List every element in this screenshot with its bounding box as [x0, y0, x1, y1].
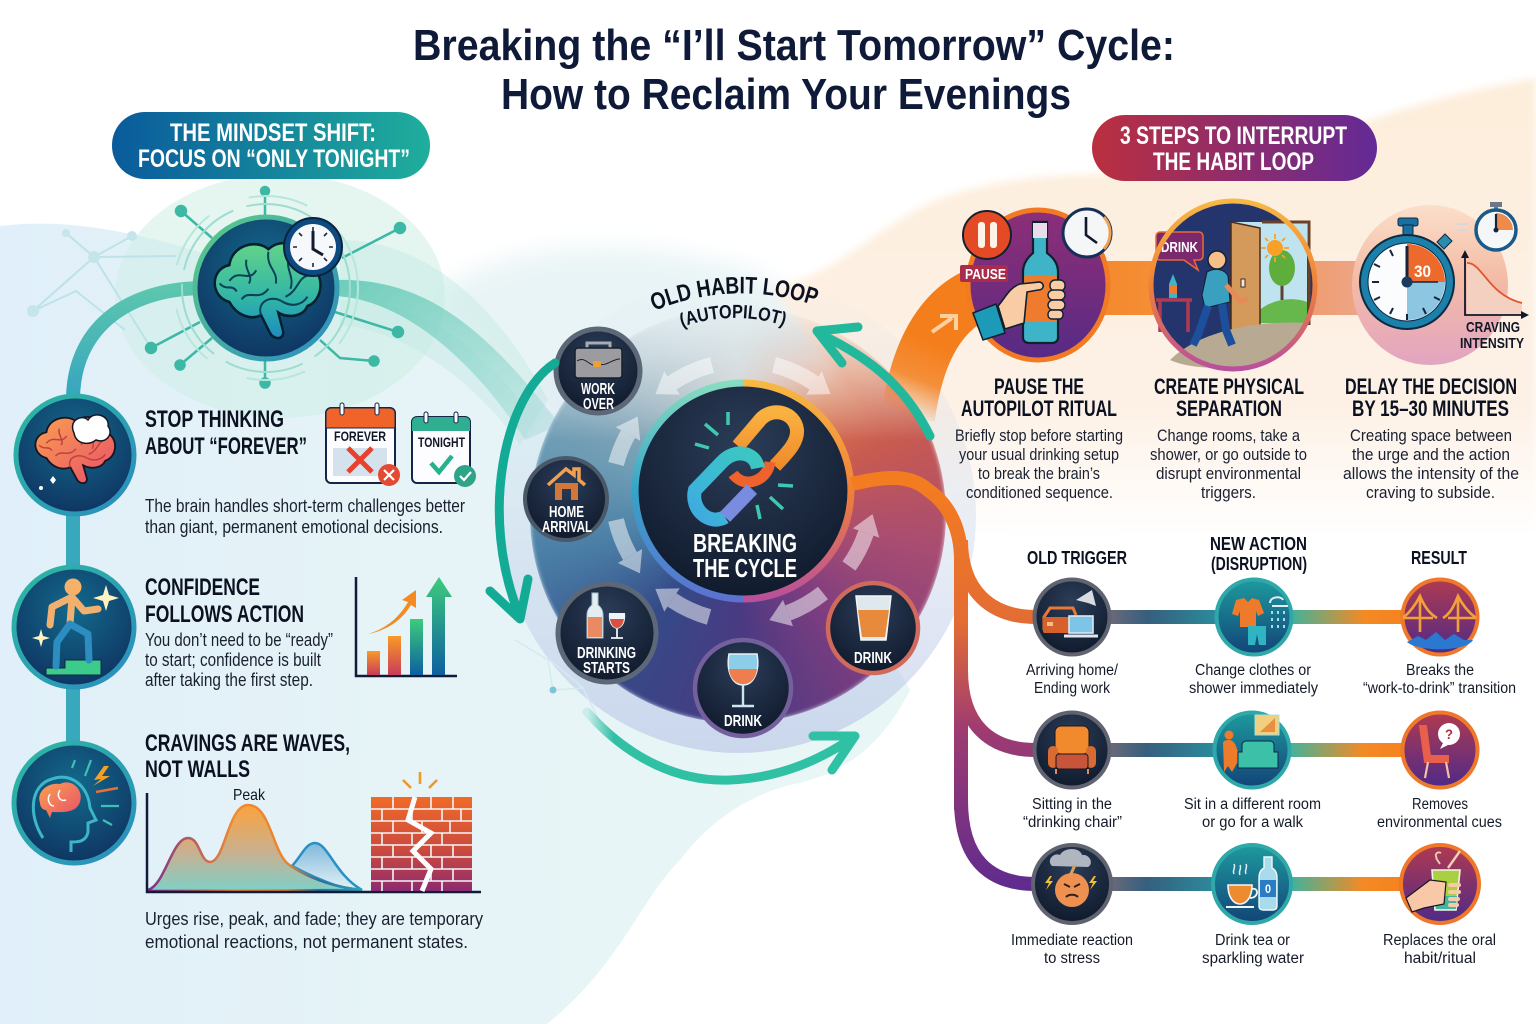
node: home arrival [525, 458, 607, 540]
heading pill: 3 steps: 3 STEPS TO INTERRUPT [1120, 122, 1347, 150]
step 3: delay [1343, 202, 1529, 502]
icon: climbing figure [14, 567, 134, 687]
item: stop thinking [16, 396, 476, 537]
icon: tea and water: 0 [1265, 882, 1271, 896]
loop label: old habit loop autopilot: OLD HABIT LOOP [650, 276, 818, 309]
captions: or go for a walk [1202, 814, 1303, 831]
central hub: breaking the cycle [635, 383, 851, 599]
heading pill: mindset shift [112, 112, 430, 179]
captions: Removes [1412, 796, 1468, 813]
panel: 3 steps to interrupt [490, 115, 1529, 780]
row connectors [1108, 610, 1406, 891]
icon: broken chain [694, 412, 797, 520]
node: home arrival: ARRIVAL [542, 519, 592, 536]
captions: Change clothes or [1195, 662, 1311, 679]
body text: emotional reactions, not permanent states. [145, 932, 468, 952]
body text: the urge and the action [1352, 446, 1510, 464]
body text: Creating space between [1350, 427, 1512, 445]
body text: after taking the first step. [145, 670, 313, 690]
label: drink bubble [1156, 232, 1203, 270]
central hub: breaking the cycle: THE CYCLE [693, 553, 797, 583]
arrows between loop stages [616, 365, 866, 617]
captions: Sit in a different room [1184, 796, 1321, 813]
body text: your usual drinking setup [959, 446, 1119, 464]
heading pill: 3 steps: THE HABIT LOOP [1153, 148, 1314, 176]
icon: sofa and person [1214, 712, 1290, 788]
node: work over: WORK [581, 381, 616, 398]
body text [1343, 427, 1519, 502]
body text: shower, or go outside to [1150, 446, 1307, 464]
captions [1023, 796, 1502, 831]
heading [145, 406, 307, 460]
arrow: bottom loop [587, 712, 855, 780]
heading [145, 574, 304, 628]
illustration: hand pausing bottle [960, 209, 1111, 360]
connecting orange band [908, 288, 1400, 418]
heading: FOLLOWS ACTION [145, 601, 304, 628]
panel: trigger to result table [852, 478, 1516, 967]
column heading: result: RESULT [1411, 548, 1467, 568]
icon: armchair [1034, 712, 1110, 788]
captions: shower immediately [1189, 680, 1318, 697]
row 2 [1023, 712, 1502, 831]
row 1 [1026, 580, 1516, 697]
icon: forever calendar [326, 403, 400, 486]
captions: environmental cues [1377, 814, 1502, 831]
heading: CONFIDENCE [145, 574, 260, 601]
heading: CRAVINGS ARE WAVES, [145, 730, 350, 757]
body text: Briefly stop before starting [955, 427, 1123, 445]
body text: triggers. [1201, 484, 1256, 502]
node: drinking starts [558, 584, 656, 682]
body text: You don’t need to be “ready” [145, 630, 333, 650]
branching trunk [852, 478, 1036, 884]
arrow: left loop [490, 363, 555, 619]
label: pause: PAUSE [965, 266, 1006, 283]
loop disc background [500, 277, 980, 753]
connecting band to loop [335, 240, 560, 445]
heading pill: mindset shift: THE MINDSET SHIFT: [170, 119, 376, 147]
icon: small up arrow on band [932, 316, 956, 332]
captions: Ending work [1034, 680, 1110, 697]
captions: Immediate reaction [1011, 932, 1133, 949]
icon: hand with glass [1401, 845, 1479, 923]
heading: STOP THINKING [145, 406, 284, 433]
captions [1026, 662, 1516, 697]
captions: “drinking chair” [1023, 814, 1122, 831]
node: drink wine: DRINK [724, 713, 763, 730]
captions [1011, 932, 1496, 967]
label: drink bubble: DRINK [1161, 240, 1198, 256]
heading: CREATE PHYSICAL [1154, 374, 1304, 399]
hub: brain with clock [146, 187, 405, 388]
body text [145, 630, 333, 690]
icon: clock [1063, 209, 1111, 257]
central hub: breaking the cycle: BREAKING [693, 528, 797, 558]
panel: old habit loop [504, 276, 976, 753]
illustration: stopwatch: 30 [1414, 262, 1431, 281]
captions: Breaks the [1406, 662, 1474, 679]
heading pill: 3 steps [1092, 115, 1377, 181]
chart: craving waves [147, 787, 481, 892]
step 1: pause [955, 209, 1123, 502]
illustration: stopwatch [1352, 202, 1529, 365]
node: drinking starts: STARTS [583, 660, 630, 677]
node: drink glass [828, 583, 918, 673]
node: home arrival: HOME [549, 504, 584, 521]
icon: car and laptop [1034, 580, 1110, 654]
icon: clothes and shower [1216, 580, 1292, 654]
column heading: new action [1210, 534, 1307, 574]
item: confidence [14, 567, 457, 690]
faint network at loop edge [515, 640, 600, 722]
title: How to Reclaim Your Evenings [501, 70, 1071, 119]
captions: habit/ritual [1404, 950, 1476, 967]
chart: rising bars [356, 577, 457, 676]
hand [973, 280, 1065, 340]
icon: bridge [1402, 580, 1478, 654]
captions: Arriving home/ [1026, 662, 1119, 679]
node: drink glass: DRINK [854, 650, 893, 667]
body text [1150, 427, 1307, 502]
body text [145, 909, 483, 952]
body text: The brain handles short-term challenges better [145, 496, 465, 516]
body text [145, 496, 465, 537]
icon: small stopwatch [1456, 202, 1516, 250]
captions: “work-to-drink” transition [1363, 680, 1516, 697]
icon: tea and water [1213, 845, 1291, 923]
column heading: new action: NEW ACTION [1210, 534, 1307, 554]
body text: allows the intensity of the [1343, 465, 1519, 483]
icon: head with brain [14, 743, 134, 863]
icon: chair and question: ? [1445, 726, 1453, 742]
icon: tonight calendar [412, 412, 476, 487]
body text: than giant, permanent emotional decisions. [145, 517, 443, 537]
body text: conditioned sequence. [966, 484, 1113, 502]
arrow: top right loop [817, 327, 930, 436]
heading: AUTOPILOT RITUAL [961, 396, 1117, 421]
column heading: new action: (DISRUPTION) [1211, 554, 1307, 574]
captions: Sitting in the [1032, 796, 1112, 813]
heading pill: mindset shift: FOCUS ON “ONLY TONIGHT” [138, 145, 410, 173]
heading: NOT WALLS [145, 756, 250, 783]
loop label: old habit loop autopilot: (AUTOPILOT) [680, 304, 786, 330]
captions: Drink tea or [1215, 932, 1290, 949]
body text: to start; confidence is built [145, 650, 321, 670]
captions: Replaces the oral [1383, 932, 1496, 949]
icon: clock [284, 218, 342, 276]
captions: sparkling water [1202, 950, 1304, 967]
row 3 [1011, 845, 1496, 967]
icon: tonight calendar: TONIGHT [418, 435, 466, 450]
column heading: old trigger: OLD TRIGGER [1027, 548, 1127, 568]
body text: Urges rise, peak, and fade; they are temporary [145, 909, 483, 929]
heading [961, 374, 1117, 421]
faint neural network [27, 229, 176, 348]
node: drink wine [695, 640, 791, 736]
icon: cracked brick wall [371, 772, 472, 891]
icon: stress face [1033, 845, 1111, 923]
chart: craving waves: Peak [233, 787, 266, 804]
body text: Change rooms, take a [1157, 427, 1301, 445]
panel: mindset shift [14, 112, 560, 952]
heading [1154, 374, 1304, 421]
heading [1345, 374, 1517, 421]
heading [145, 730, 350, 783]
illustration: walking through door [1151, 201, 1315, 369]
chart: craving intensity [1460, 250, 1529, 352]
heading: SEPARATION [1176, 396, 1282, 421]
heading: ABOUT “FOREVER” [145, 433, 307, 460]
step 2: separation [1150, 201, 1315, 502]
icon: chair and question [1402, 712, 1478, 788]
icon: brain with fog [16, 396, 134, 514]
icon: forever calendar: FOREVER [334, 428, 386, 444]
title: Breaking the “I’ll Start Tomorrow” Cycle: [413, 21, 1175, 70]
body text: to break the brain’s [978, 465, 1100, 483]
chart: craving intensity: INTENSITY [1460, 335, 1524, 352]
chart: craving intensity: CRAVING [1466, 319, 1520, 336]
body text: disrupt environmental [1156, 465, 1301, 483]
captions: to stress [1044, 950, 1100, 967]
timeline rail [66, 288, 205, 800]
node: work over: OVER [583, 396, 614, 413]
node: work over [556, 329, 640, 413]
node: drinking starts: DRINKING [577, 645, 636, 662]
icon: pause button [963, 211, 1011, 259]
heading: PAUSE THE [994, 374, 1084, 399]
loop label: old habit loop autopilot [650, 276, 818, 330]
title [413, 21, 1175, 119]
body text [955, 427, 1123, 502]
item: cravings [14, 730, 483, 952]
body text: craving to subside. [1366, 484, 1495, 502]
